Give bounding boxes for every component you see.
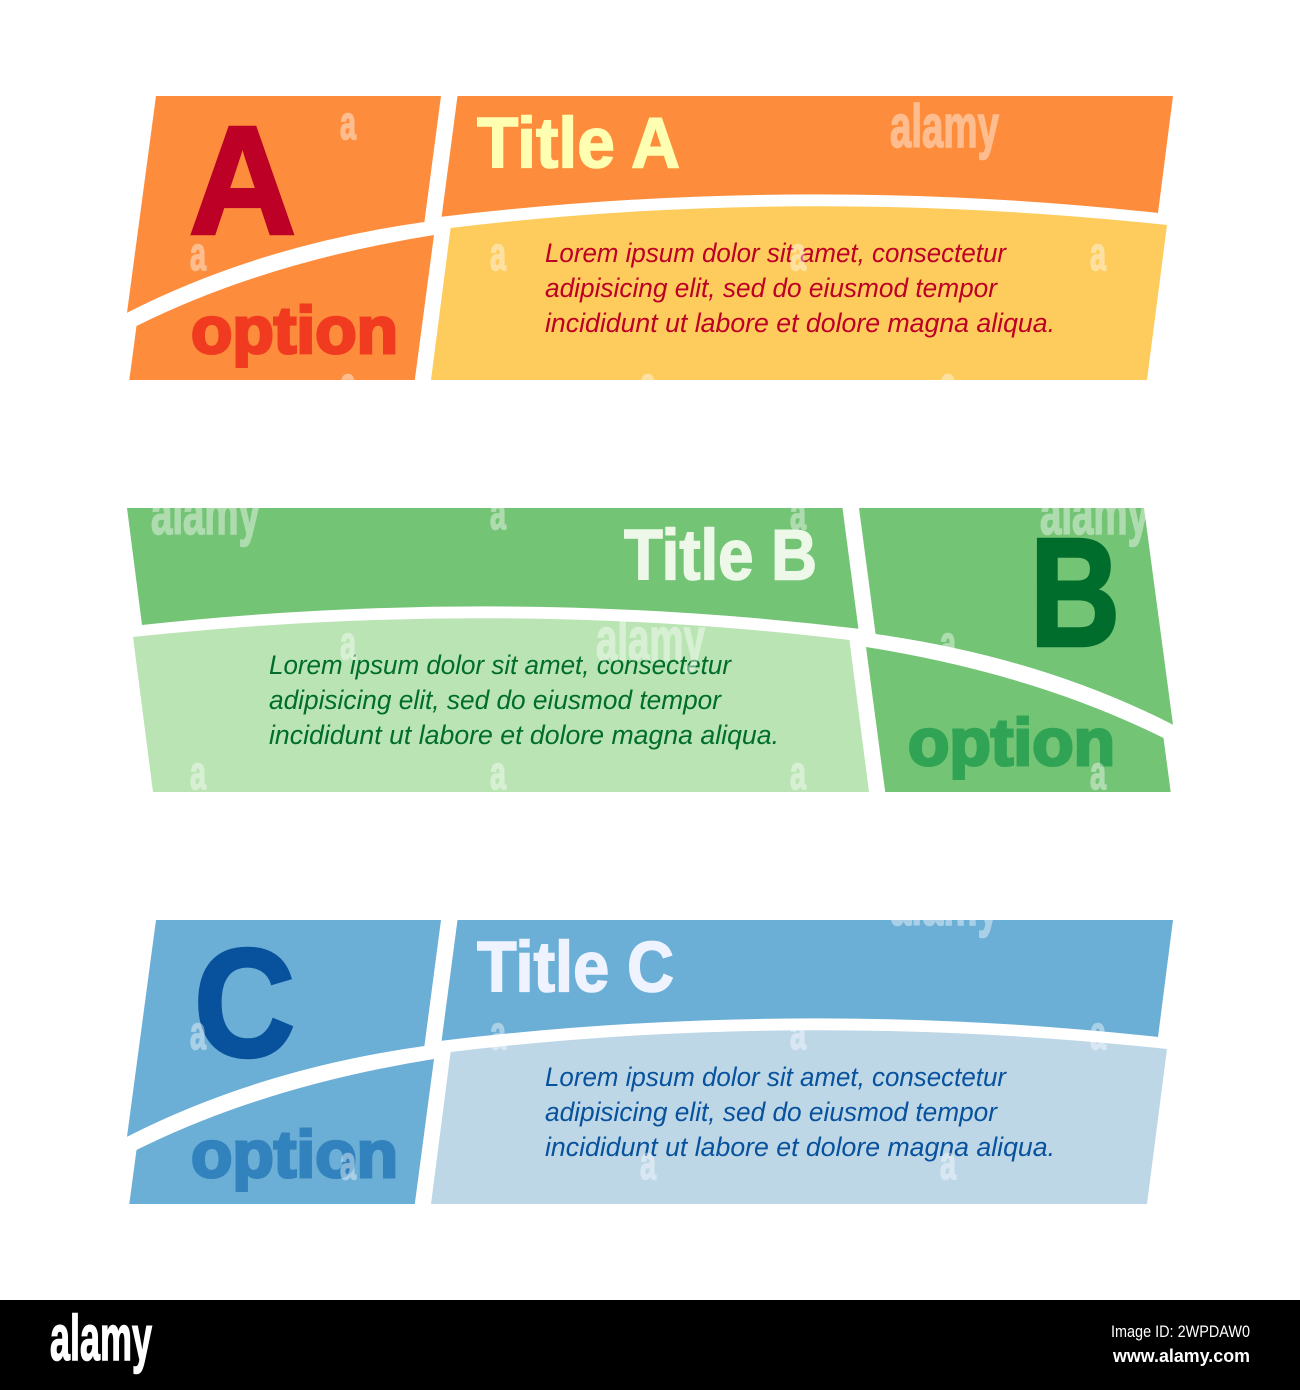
watermark overlay: a — [1090, 1006, 1107, 1059]
body band C — [431, 1030, 1167, 1204]
watermark overlay: a — [640, 1136, 657, 1189]
label: option A: option — [191, 293, 398, 367]
watermark overlay: a — [790, 227, 807, 280]
letter tile A — [127, 96, 441, 313]
heading: Title C: Title C — [477, 928, 674, 1008]
watermark overlay: a — [340, 1136, 357, 1189]
watermark overlay: a — [940, 616, 957, 669]
website: www.alamy.com — [1112, 1346, 1250, 1366]
body text C: adipisicing elit, sed do eiusmod tempor — [545, 1097, 998, 1127]
watermark overlay: a — [190, 1006, 207, 1059]
body text C — [545, 1062, 1055, 1162]
watermark overlay: a — [190, 227, 207, 280]
letter tile B — [859, 508, 1173, 725]
body text B — [269, 650, 779, 750]
watermark overlay — [151, 93, 1149, 1189]
panel: option B — [127, 506, 1173, 792]
body text A: Lorem ipsum dolor sit amet, consectetur — [545, 238, 1007, 268]
watermark overlay: alamy — [890, 871, 999, 938]
watermark overlay: alamy — [890, 93, 999, 160]
panel: option C — [127, 917, 1173, 1204]
body text A — [545, 238, 1055, 338]
body text B: incididunt ut labore et dolore magna aliqua. — [269, 720, 779, 750]
footer logo: alamy — [50, 1302, 152, 1374]
watermark overlay: a — [340, 96, 357, 149]
body text B: adipisicing elit, sed do eiusmod tempor — [269, 685, 722, 715]
watermark overlay: a — [490, 486, 507, 539]
watermark overlay: a — [490, 1006, 507, 1059]
image id: Image ID: 2WPDAW0 — [1111, 1322, 1250, 1341]
option tile B — [866, 647, 1171, 792]
title band C — [442, 920, 1173, 1041]
body band A — [431, 206, 1167, 380]
footer bar — [0, 1300, 1300, 1390]
label: option B: option — [908, 705, 1115, 779]
watermark overlay: a — [340, 616, 357, 669]
body text C: Lorem ipsum dolor sit amet, consectetur — [545, 1062, 1007, 1092]
watermark overlay: a — [490, 227, 507, 280]
big letter C: C — [194, 917, 295, 1089]
body text B: Lorem ipsum dolor sit amet, consectetur — [269, 650, 732, 680]
label: option C: option — [191, 1117, 398, 1191]
watermark overlay: alamy — [596, 606, 705, 673]
watermark overlay: a — [190, 746, 207, 799]
letter tile C — [127, 920, 441, 1137]
body text C: incididunt ut labore et dolore magna aliqua. — [545, 1132, 1055, 1162]
panel: option A — [127, 94, 1173, 380]
body band B — [133, 618, 869, 792]
watermark overlay: a — [1090, 746, 1107, 799]
body text A: adipisicing elit, sed do eiusmod tempor — [545, 273, 998, 303]
watermark overlay: a — [790, 1006, 807, 1059]
body text A: incididunt ut labore et dolore magna aliqua. — [545, 308, 1055, 338]
watermark overlay: a — [1090, 227, 1107, 280]
watermark overlay: a — [490, 746, 507, 799]
watermark overlay: a — [940, 1136, 957, 1189]
heading: Title B: Title B — [624, 516, 817, 596]
title band B — [127, 508, 858, 629]
watermark overlay: a — [640, 357, 657, 410]
option tile C — [129, 1059, 434, 1204]
option tile A — [129, 235, 434, 380]
watermark overlay: a — [790, 746, 807, 799]
watermark overlay: alamy — [151, 480, 260, 547]
big letter A: A — [189, 94, 296, 266]
big letter B: B — [1030, 506, 1120, 678]
heading: Title A: Title A — [477, 104, 680, 184]
watermark overlay: alamy — [1040, 480, 1149, 547]
watermark overlay: a — [340, 357, 357, 410]
title band A — [442, 96, 1173, 217]
watermark overlay: a — [940, 357, 957, 410]
watermark overlay: a — [790, 486, 807, 539]
